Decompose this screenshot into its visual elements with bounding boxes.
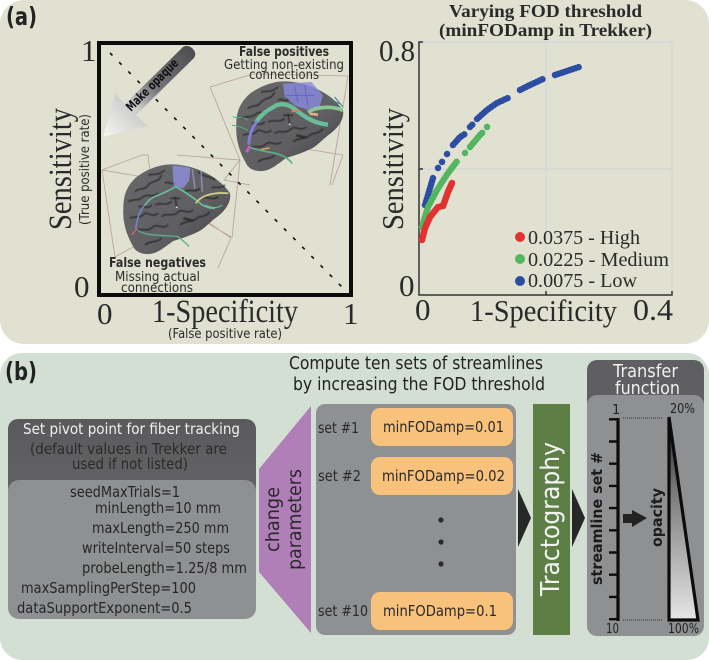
axis labels: 0 [97, 296, 112, 331]
chart axis labels: 0.4 [633, 292, 674, 327]
legend: 0.0225 - Medium [528, 249, 669, 271]
ROC schematic plot [43, 33, 358, 342]
opacity ramp: 20% [670, 402, 695, 417]
panel: streamline sets [316, 404, 516, 635]
arrow: to tractography [518, 489, 531, 547]
label: (b): (b) [5, 357, 37, 386]
wireframe boxes [102, 74, 348, 268]
opacity ramp: 100% [668, 622, 699, 637]
legend: 0.0375 - High [528, 227, 640, 249]
chart axis labels: 0.8 [379, 33, 415, 68]
chart axis labels [375, 33, 674, 328]
axis labels: 1-Specificity [152, 294, 298, 330]
callout: false positives: connections [249, 68, 319, 83]
legend: 0.0075 - Low [528, 270, 638, 292]
parameter list: maxSamplingPerStep=100 [21, 579, 196, 597]
axis labels: 0 [74, 269, 90, 304]
pivot subheading [30, 440, 227, 473]
heading: compute ten sets: by increasing the FOD threshold [293, 375, 545, 395]
arrow: set to opacity [623, 510, 647, 527]
callout: false positives: False positives [239, 45, 329, 60]
streamline set scale: 1 [612, 403, 620, 418]
legend [515, 227, 669, 292]
set 10: minFODamp=0.1 [383, 602, 497, 620]
heading: compute ten sets: Compute ten sets of streamlines [289, 354, 543, 374]
parameter list: minLength=10 mm [95, 499, 221, 517]
chart axis labels: 0 [399, 268, 414, 303]
axis labels: 1 [343, 296, 358, 331]
callout: false negatives [109, 256, 206, 296]
streamline set scale [588, 403, 663, 637]
shape: change parameters [259, 406, 311, 633]
series: 0.0075 low [425, 67, 579, 205]
set 2 [318, 457, 513, 495]
transfer heading: function [615, 378, 680, 399]
brain: false positives [232, 81, 343, 171]
set 1 [318, 408, 513, 446]
axis labels: (False positive rate) [168, 327, 282, 342]
set 1: minFODamp=0.01 [383, 418, 504, 436]
axis labels [43, 33, 358, 342]
chart title: Varying FOD threshold [449, 1, 642, 21]
pivot heading: Set pivot point for fiber tracking [23, 420, 240, 438]
brain: false negatives [123, 164, 230, 254]
chart axis labels: 1-Specificity [470, 293, 617, 328]
callout: false negatives: Missing actual [115, 270, 200, 285]
diagonal reference line [110, 53, 346, 291]
set 10 [318, 592, 513, 630]
chart title [439, 1, 652, 41]
arrow: make opaque: Make opaque [123, 55, 181, 114]
set 1: set #1 [318, 419, 359, 437]
callout: false negatives: False negatives [109, 256, 206, 271]
shape: change parameters: change [262, 487, 284, 552]
box: tractography: Tractography [536, 442, 566, 597]
arrow: make opaque [103, 46, 195, 137]
panel: pivot point parameters [8, 419, 256, 619]
parameter list: maxLength=250 mm [92, 519, 229, 537]
callout: false negatives: connections [121, 281, 193, 296]
label: (a): (a) [6, 2, 37, 31]
opacity ramp [648, 402, 699, 637]
chart axis labels: Sensitivity [375, 108, 410, 230]
axis labels: (True positive rate) [78, 114, 93, 225]
panel: (b) pipeline background [0, 353, 709, 660]
parameter list: seedMaxTrials=1 [70, 483, 180, 501]
panel: transfer function [587, 360, 704, 637]
set 10: set #10 [318, 602, 368, 620]
plot frame [99, 43, 351, 295]
panel: (a) ROC background [0, 0, 709, 344]
parameter list: writeInterval=50 steps [82, 539, 230, 557]
ellipsis dots [438, 517, 444, 567]
parameter list: dataSupportExponent=0.5 [17, 599, 192, 617]
chart axis labels: 0 [415, 292, 430, 327]
streamline set scale: streamline set # [588, 452, 606, 585]
transfer heading [612, 361, 680, 399]
chart title: (minFODamp in Trekker) [439, 20, 652, 41]
parameter list [17, 483, 247, 617]
transfer heading: Transfer [612, 361, 679, 382]
box: tractography [533, 404, 570, 635]
set 2: set #2 [318, 467, 361, 485]
arrow: to transfer function [572, 489, 585, 547]
axis labels: Sensitivity [43, 108, 79, 230]
set 2: minFODamp=0.02 [382, 467, 505, 485]
axis labels: 1 [81, 33, 96, 68]
callout: false positives [224, 45, 344, 83]
pivot subheading: (default values in Trekker are [30, 440, 227, 458]
opacity ramp: opacity [648, 488, 666, 547]
shape: change parameters: parameters [284, 469, 306, 570]
pivot subheading: used if not listed) [72, 455, 188, 473]
series: 0.0375 high [422, 183, 452, 240]
callout: false positives: Getting non-existing [224, 58, 344, 73]
scatter chart [375, 33, 674, 328]
heading: compute ten sets [289, 354, 545, 395]
series: 0.0225 medium [422, 126, 488, 227]
streamline set scale: 10 [606, 622, 619, 637]
parameter list: probeLength=1.25/8 mm [82, 559, 247, 577]
